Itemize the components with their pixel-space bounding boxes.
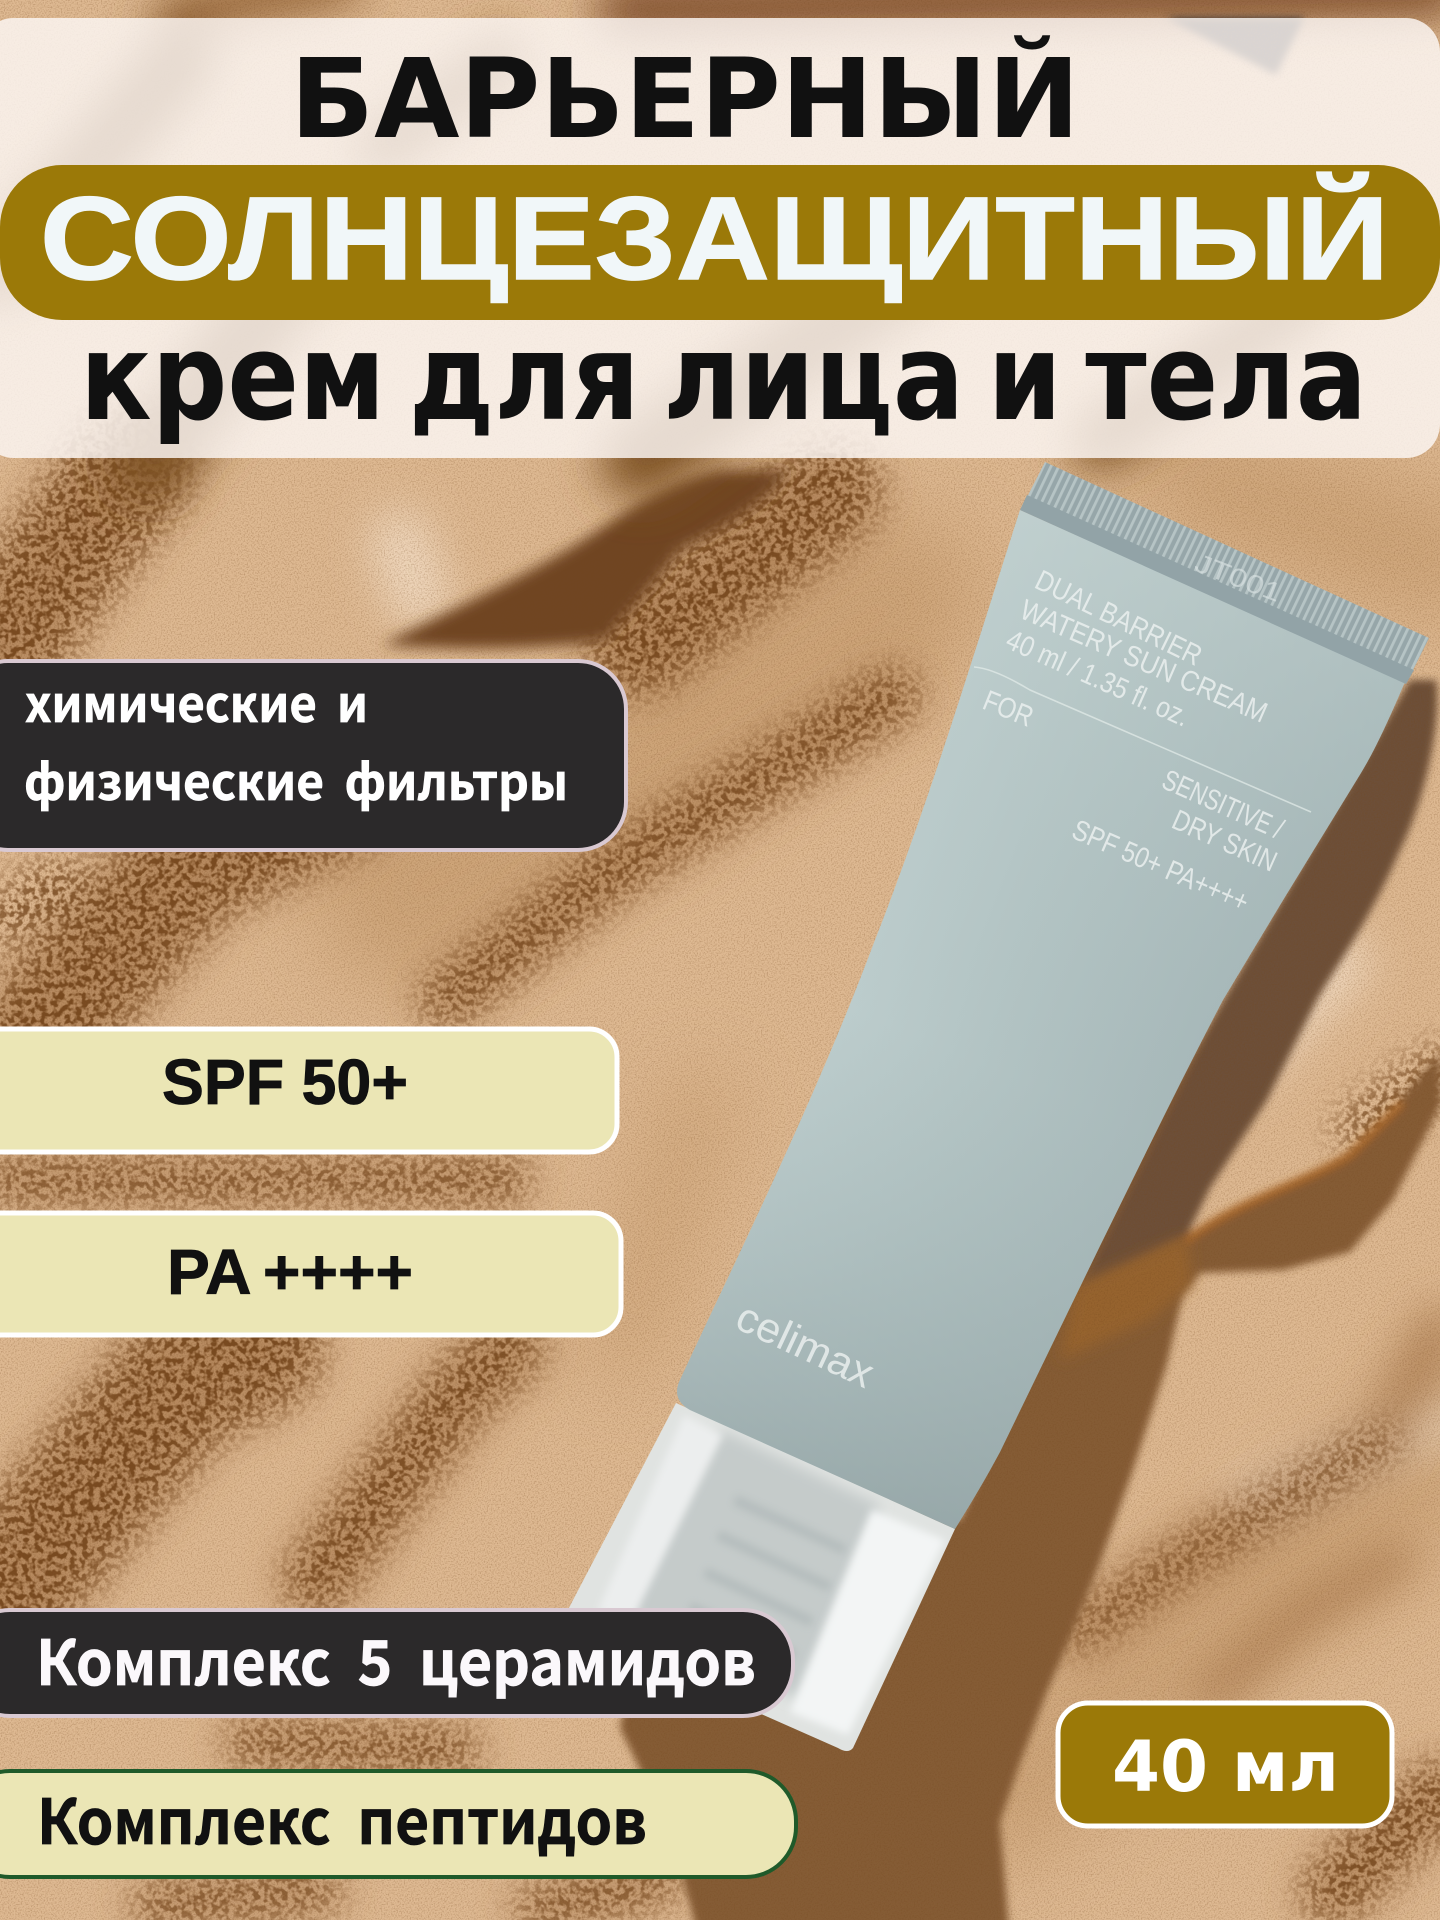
badge: PA — [0, 1213, 621, 1335]
badge: volume — [1058, 1703, 1392, 1826]
badge: filters: химические и — [25, 665, 368, 737]
badge: PA: PA ++++ — [167, 1236, 413, 1308]
tube crimp — [1022, 462, 1429, 682]
crimp code: JT001 — [1191, 548, 1286, 608]
tube label: DRY SKIN — [1167, 804, 1282, 879]
brand name: celimax — [729, 1293, 881, 1397]
tube label: FOR — [978, 685, 1038, 734]
badge: ceramides: Комплекс 5 церамидов — [36, 1613, 756, 1703]
tube label: SPF 50+ PA++++ — [1067, 814, 1253, 919]
tube cast shadow — [620, 680, 1440, 1920]
tube label: SENSITIVE / — [1157, 764, 1289, 846]
badge: peptides — [0, 1771, 796, 1877]
badge: SPF — [0, 1029, 617, 1152]
tube label: 40 ml / 1.35 fl. oz. — [1001, 624, 1194, 734]
badge: peptides: Комплекс пептидов — [37, 1772, 647, 1862]
badge: filters — [0, 661, 626, 850]
badge: SPF: SPF 50+ — [162, 1046, 408, 1118]
title line 1: БАРЬЕРНЫЙ — [290, 34, 1080, 163]
header panel — [0, 18, 1440, 458]
title line 2: СОЛНЦЕЗАЩИТНЫЙ — [40, 171, 1389, 305]
badge: volume: 40 мл — [1112, 1726, 1339, 1808]
tube body — [677, 510, 1405, 1529]
tube label — [974, 565, 1311, 919]
product tube — [560, 462, 1429, 1751]
badge: filters: физические фильтры — [24, 743, 568, 815]
gold banner — [0, 165, 1440, 320]
tube label: DUAL BARRIER — [1030, 565, 1207, 673]
tube cap — [560, 1403, 955, 1751]
top background shadow bands — [0, 0, 1440, 460]
dark ridge shadow — [382, 470, 790, 648]
tube label: WATERY SUN CREAM — [1015, 594, 1272, 729]
